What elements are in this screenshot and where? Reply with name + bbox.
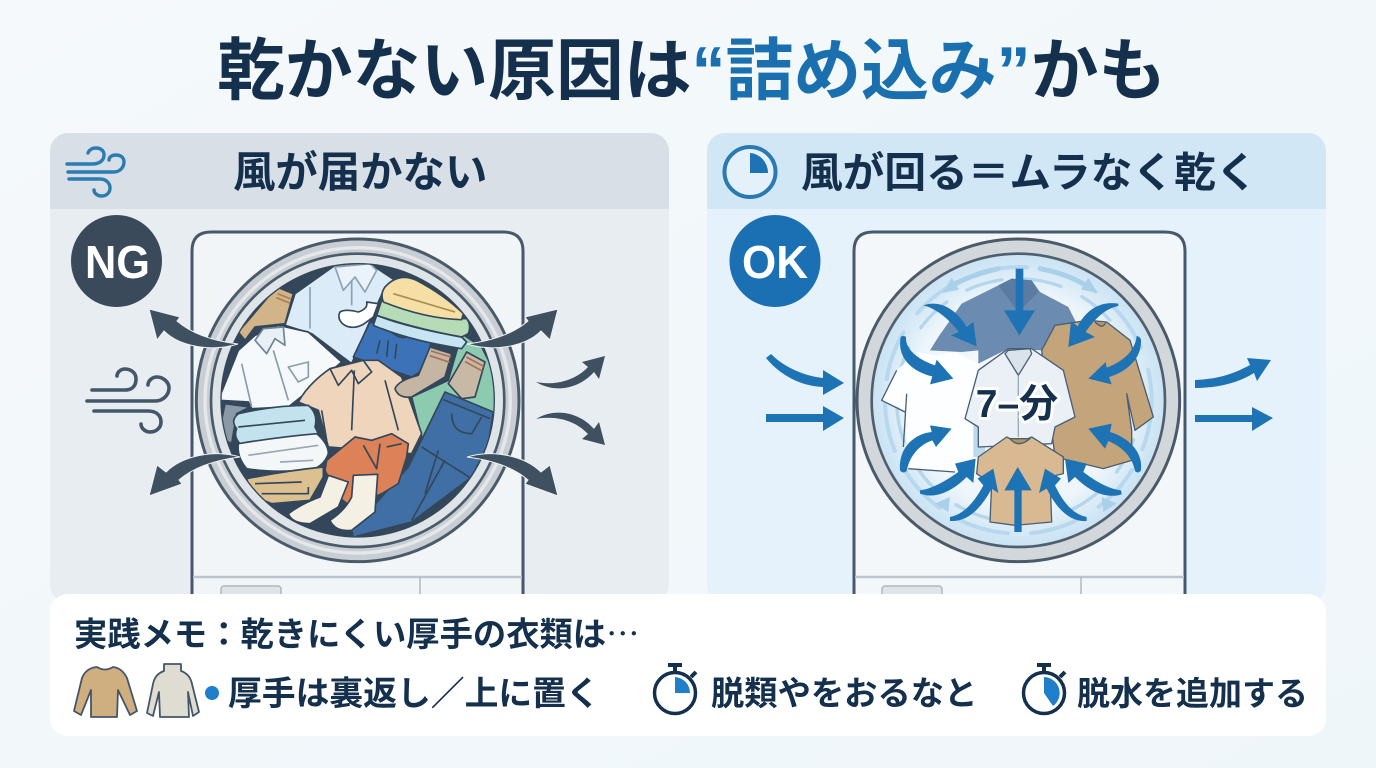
- clothing: pale inner shirt: [973, 424, 985, 457]
- memo heading: 実践メモ：乾きにくい厚手の衣類は…: [74, 607, 639, 656]
- icon: wind header: [67, 148, 124, 196]
- pale swirl arrowheads: [935, 278, 1117, 512]
- icon: stopwatch quarter: [654, 665, 696, 714]
- arrows: air going out: [1195, 358, 1273, 431]
- clothing: jeans: [352, 392, 493, 537]
- washer body: [854, 232, 1185, 600]
- clothing: white t-shirt: [882, 352, 978, 472]
- panel: practice memo: [50, 594, 1326, 736]
- arrows: air reaching clothes: [900, 269, 1141, 532]
- heading: no airflow: 風が届かない: [233, 149, 487, 196]
- arrows: air going in: [766, 354, 844, 431]
- clothing: tan long sleeve: [1042, 320, 1153, 469]
- clothing: beige shirt: [298, 360, 422, 454]
- clothing: white sock 1: [288, 475, 348, 524]
- clothing: light blue shirt: [285, 264, 395, 364]
- badge: OK: OK: [742, 236, 808, 288]
- swirling airflow rings: [885, 267, 1152, 534]
- clothing: grey shirt hem: [222, 404, 251, 442]
- clothing: navy blue shirt: [930, 279, 1077, 364]
- tip: turn inside out: 厚手は裏返し／上に置く: [228, 675, 600, 713]
- clothing: white shirt: [218, 325, 342, 409]
- clothing: green right: [412, 336, 494, 436]
- clothing: green folded: [377, 300, 470, 337]
- clothing: beige t-shirt: [977, 437, 1063, 525]
- clothing: light blue folded: [373, 315, 467, 349]
- arrows: air escaping right: [467, 309, 605, 496]
- panel: OK air circulates: [707, 133, 1326, 603]
- icon: stopwatch third: [1024, 665, 1065, 714]
- clothing: white cloth: [339, 302, 378, 327]
- icon: grey turtleneck: [147, 664, 199, 717]
- clothing: blue shirt: [353, 322, 432, 377]
- badge: NG: NG: [85, 236, 150, 288]
- bullet dot: [205, 686, 219, 700]
- washer drum packed with clothes: [196, 239, 519, 562]
- icon: tan sweater: [74, 667, 137, 717]
- washer drum with room for air: [857, 239, 1180, 562]
- clothing: white sock 2: [330, 474, 378, 531]
- arrows: air escaping left: [149, 309, 240, 496]
- clothing: orange garment: [325, 434, 408, 507]
- washer body: [192, 232, 523, 600]
- clothing: tan towel: [247, 467, 323, 504]
- tip: extra spin: 脱水を追加する: [1077, 675, 1308, 712]
- badge: NG: [71, 215, 162, 307]
- badge: OK: [730, 215, 820, 307]
- clothing: blue towel: [234, 405, 320, 444]
- clothing: tan sock: [238, 287, 293, 340]
- clothing: white towel: [238, 434, 328, 471]
- title: 乾かない原因は“詰め込み”かも: [217, 34, 1166, 109]
- icon: clock header: [724, 147, 776, 197]
- drying time label: 7–分: [976, 383, 1058, 426]
- tip: air gaps: 脱類やをおるなと: [711, 676, 977, 713]
- clothing: socks tan grey: [395, 347, 452, 397]
- heading: air circulates: 風が回る＝ムラなく乾く: [801, 149, 1257, 196]
- clothing: yellow folded: [382, 277, 463, 320]
- panel: NG not enough airflow: [50, 133, 669, 603]
- icon: weak wind: [87, 369, 169, 432]
- clothing: white center shirt: [965, 349, 1075, 447]
